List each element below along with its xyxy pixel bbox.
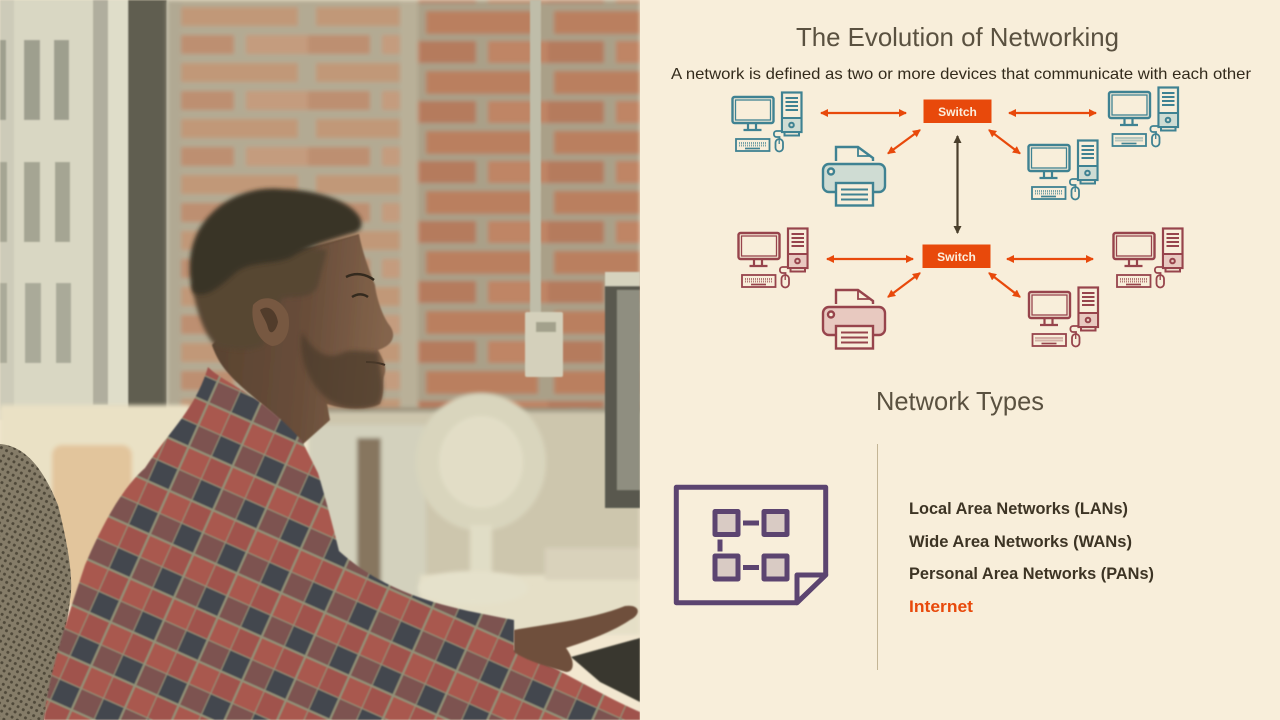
icon: computer right [1114, 228, 1182, 288]
arrow: upper switch to lower right computer [989, 130, 1020, 154]
neck and face [212, 234, 393, 445]
title: The Evolution of Networking [796, 22, 1119, 52]
icon: computer lower right [1029, 288, 1098, 346]
list item: Internet: Internet [909, 597, 973, 616]
beard [301, 332, 383, 408]
hair [190, 189, 362, 295]
hand [514, 606, 638, 672]
panel: photo of man working at a computer [0, 0, 640, 720]
arrow: lower switch to right computer [1007, 258, 1093, 260]
list item: WANs: Wide Area Networks (WANs) [909, 532, 1132, 551]
arrow: printer to lower switch [888, 273, 920, 297]
icon: printer [823, 290, 885, 348]
arrow: between switches [956, 136, 959, 233]
icon: computer top right [1109, 88, 1178, 146]
icon: computer lower right [1028, 140, 1098, 200]
arrow: upper switch to right computer [1009, 112, 1096, 114]
mouth [366, 362, 385, 365]
switch: lower: Switch [937, 250, 976, 264]
arrow: lower switch to lower right computer [989, 273, 1020, 297]
switch: upper [924, 100, 992, 123]
pipe and thermostat [525, 0, 563, 377]
arrow: computer to upper switch [821, 112, 906, 114]
icon: computer top left [732, 92, 802, 152]
plaid shirt [44, 367, 640, 720]
heading: network types: Network Types [876, 386, 1044, 416]
switch: upper: Switch [938, 105, 977, 119]
icon: network document [676, 487, 826, 603]
fade haircut [192, 240, 327, 350]
desk area and wall below window [0, 405, 640, 635]
warm overlay tint [0, 0, 640, 720]
icon: computer left [738, 228, 808, 288]
window background [0, 0, 170, 420]
icon: printer [823, 147, 885, 206]
subtitle: A network is defined as two or more devices that communicate with each other [671, 66, 1252, 83]
list: network types [909, 499, 1154, 616]
network diagram [732, 88, 1182, 348]
group: upper network [732, 88, 1178, 206]
list item: PANs: Personal Area Networks (PANs) [909, 564, 1154, 583]
arrow: printer to upper switch [888, 130, 920, 154]
arrow: computer to lower switch [827, 258, 913, 260]
vertical divider [876, 444, 878, 670]
office chair [0, 444, 71, 720]
ear [252, 298, 289, 346]
brick wall [167, 0, 640, 412]
panel: networking content [640, 0, 1280, 720]
group: lower network [738, 228, 1182, 348]
list item: LANs: Local Area Networks (LANs) [909, 499, 1128, 518]
eyebrow and eye [346, 274, 374, 297]
man [44, 189, 640, 720]
desk fan [416, 393, 546, 605]
keyboard [571, 638, 640, 702]
switch: lower [922, 244, 990, 268]
computer monitor [605, 272, 640, 508]
